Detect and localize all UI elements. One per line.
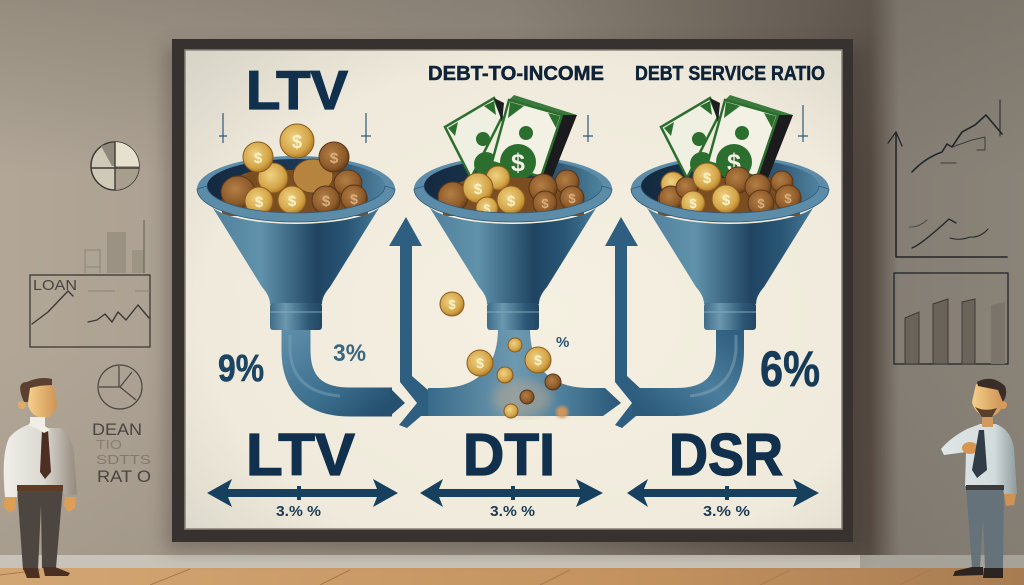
coins in funnel: LTV: $ [255, 194, 264, 211]
hand on chest [962, 442, 978, 454]
label: DSR: DSR [669, 422, 783, 488]
drain pipe: DSR [632, 328, 736, 402]
wall sketch: right line chart [888, 100, 1007, 257]
percentage label: 6%: 6% [760, 341, 820, 397]
range value: DTI: 3.% % [490, 503, 535, 520]
legs [17, 486, 63, 570]
label: DTI: DTI [463, 422, 555, 488]
heading: LTV: LTV [246, 59, 348, 121]
heading: Debt service ratio: DEBT SERVICE RATIO [635, 63, 825, 85]
torso and arms [4, 424, 77, 497]
range arrow: DTI [420, 479, 603, 507]
range arrow: DSR [627, 479, 819, 507]
range value: LTV: 3.% % [276, 503, 321, 520]
coins in funnel: DTI [438, 166, 584, 219]
funnel back and interior [197, 156, 395, 222]
hair [977, 379, 1006, 402]
falling coins: $ [534, 352, 542, 368]
falling coins: $ [476, 355, 484, 371]
funnel back and interior [414, 156, 612, 222]
banknote: front: $ [727, 149, 741, 177]
up arrow: right [605, 217, 642, 428]
funnel cone and rim [631, 186, 829, 330]
line: DEAN: DEAN [92, 420, 142, 439]
funnel: DTI [414, 95, 621, 416]
up arrow: left [389, 217, 428, 428]
coins in funnel: DSR: $ [703, 170, 712, 187]
presentation board [172, 39, 853, 542]
funnel cone and rim [414, 186, 612, 330]
hair [20, 378, 52, 402]
coins in funnel: DSR: $ [722, 192, 731, 209]
hands [3, 497, 76, 513]
neck [982, 417, 993, 427]
torso and arms [941, 424, 1017, 494]
coins in funnel: DTI: $ [484, 202, 491, 216]
wall sketch: second pie chart [98, 365, 142, 409]
banknotes: DTI [445, 95, 577, 180]
legs [966, 486, 1004, 568]
banknote: front: $ [511, 149, 525, 177]
belt [966, 485, 1004, 490]
loan label: LOAN [33, 277, 77, 294]
drain pipe: DTI [428, 328, 621, 416]
head [28, 386, 57, 418]
frame shadow [166, 46, 866, 551]
coins in funnel: DSR: $ [757, 196, 765, 211]
heading: Debt-to-income: DEBT-TO-INCOME [428, 63, 604, 85]
percentage label: 9%: 9% [218, 348, 264, 390]
person: right [941, 379, 1017, 578]
banknote: back [661, 98, 720, 178]
funnel: LTV [197, 124, 405, 416]
coins in funnel: DTI: $ [507, 193, 516, 210]
drain pipe: LTV [290, 328, 405, 416]
coins in funnel: DTI: $ [474, 181, 483, 198]
coins in funnel: LTV: $ [322, 193, 331, 210]
coins in funnel: LTV: $ [350, 191, 358, 207]
percentage label: %: % [556, 334, 569, 351]
line: SDT: SDTTS [96, 452, 151, 467]
funnel back and interior [631, 156, 829, 222]
wall sketch: pie chart [91, 142, 139, 190]
falling coins [440, 292, 568, 418]
beard [975, 407, 997, 417]
banknotes: DSR [661, 95, 793, 180]
ear [999, 401, 1007, 409]
coins in funnel: DSR [658, 163, 801, 216]
coins in funnel: DSR: $ [784, 191, 792, 206]
falling coins: $ [448, 297, 456, 312]
tie [972, 430, 987, 478]
wall sketch: ratio text [92, 420, 151, 486]
head [972, 384, 1003, 417]
label: LTV: LTV [246, 422, 355, 488]
line: RATIO: RAT O [97, 467, 151, 486]
wall sketch: loan chart [30, 275, 150, 347]
belt [17, 485, 63, 491]
banknote: back [445, 98, 504, 178]
range value: DSR: 3.% % [703, 503, 750, 520]
shoes [23, 567, 70, 578]
percentage label: 3%: 3% [333, 340, 366, 367]
shoes [953, 567, 1003, 578]
funnel: DSR [631, 95, 829, 402]
coins in funnel: LTV [221, 124, 368, 216]
small pointer marks [219, 105, 808, 143]
coins in funnel: DTI: $ [541, 196, 549, 211]
range arrow: LTV [207, 479, 398, 507]
wall sketch: right bar chart [894, 273, 1008, 364]
ear [18, 401, 26, 409]
lower hand [1004, 494, 1016, 506]
coins in funnel: LTV: $ [292, 132, 302, 152]
wall sketch: faint bars [85, 220, 144, 273]
neck and collar [28, 417, 50, 433]
person: left [3, 378, 77, 578]
coins in funnel: LTV: $ [254, 150, 263, 167]
coins in funnel: DTI: $ [568, 191, 576, 206]
coins in funnel: DSR: $ [689, 196, 697, 211]
floor and baseboard [0, 555, 1024, 585]
coins in funnel: LTV: $ [330, 150, 339, 167]
funnel cone and rim [197, 186, 395, 330]
line: TIO: TIO [96, 437, 122, 452]
tie [40, 430, 51, 479]
coins in funnel: LTV: $ [288, 193, 297, 210]
